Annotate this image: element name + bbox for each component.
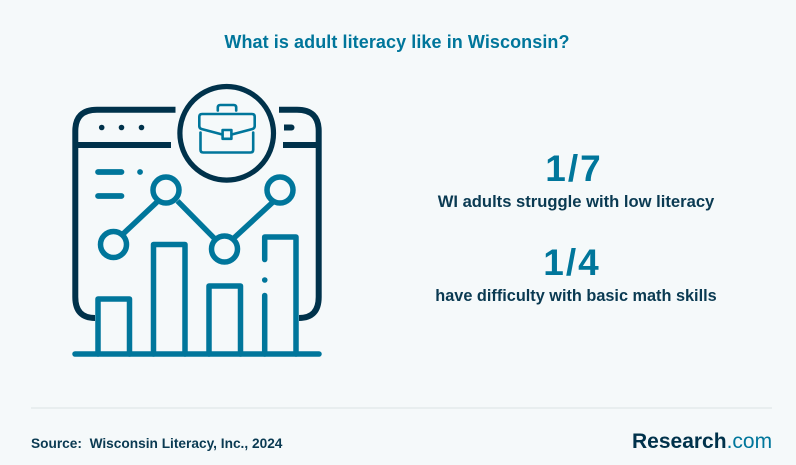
bar chart — [75, 237, 319, 354]
title: What is adult literacy like in Wisconsin? — [224, 32, 570, 52]
caption: WI adults struggle with low literacy — [438, 192, 714, 211]
number 1/7: 1/7 — [545, 148, 603, 189]
number 1/4: 1/4 — [543, 242, 601, 282]
stat: 1/4 — [435, 242, 717, 305]
line chart — [100, 177, 293, 262]
window frame — [75, 110, 319, 318]
text lines — [98, 172, 140, 196]
icon: briefcase — [199, 105, 255, 152]
caption: have difficulty with basic math skills — [435, 287, 717, 305]
logo: Research.com: Research.com — [632, 430, 772, 453]
circle badge — [180, 86, 274, 180]
source: Source: Wisconsin Literacy, Inc., 2024 — [31, 436, 282, 451]
window dots — [99, 124, 294, 130]
stat: 1/7 — [438, 148, 714, 211]
footer divider — [31, 407, 772, 409]
